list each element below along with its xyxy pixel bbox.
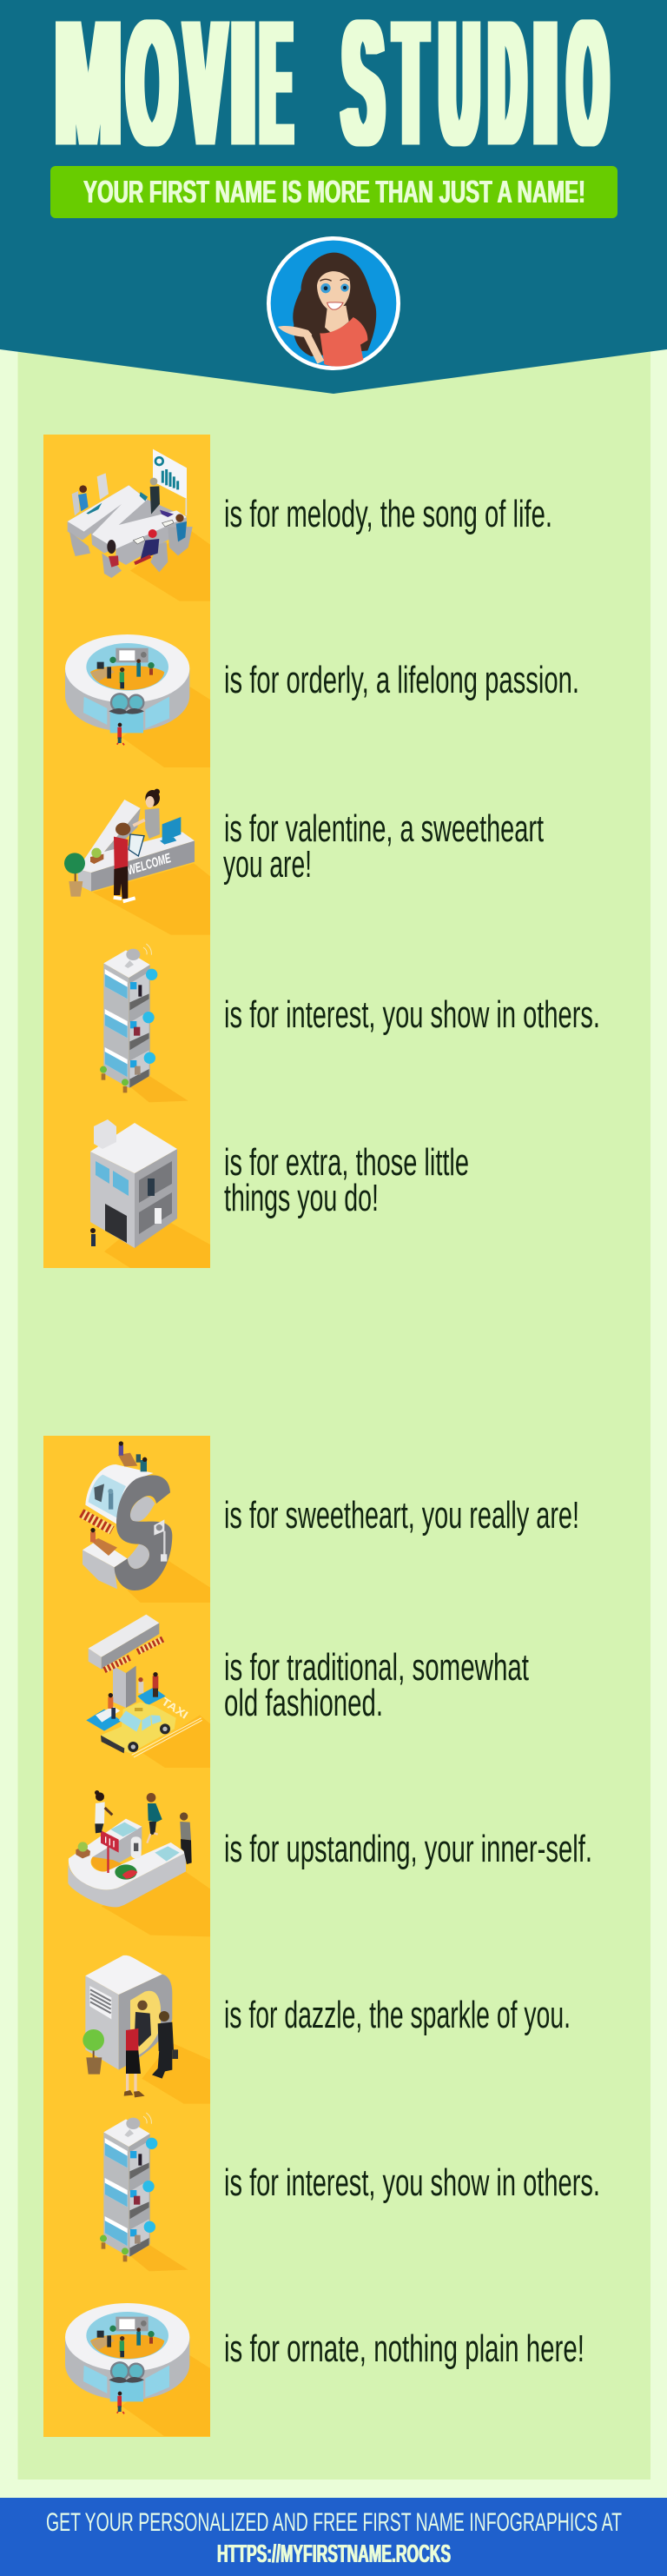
illustration: letter U food counter bbox=[68, 1790, 210, 1936]
illustration: letter V reception desk: WELCOME bbox=[126, 851, 173, 878]
subtitle bar bbox=[50, 166, 617, 218]
line: V: you are! bbox=[223, 843, 312, 886]
header banner bbox=[0, 0, 667, 394]
illustration: letter T taxi stand: TAXI bbox=[159, 1696, 190, 1722]
footer: HTTPS://MYFIRSTNAME.ROCKS bbox=[217, 2540, 451, 2568]
illustration: letter I tower bbox=[100, 944, 188, 1102]
first name image column: MOVIE bbox=[43, 435, 210, 1268]
illustration: letter S building bbox=[82, 1441, 210, 1603]
line: V bbox=[223, 807, 544, 886]
illustration: letter E building bbox=[90, 1119, 210, 1268]
second name image column: STUDIO bbox=[43, 1436, 210, 2437]
footer bbox=[0, 2498, 667, 2576]
illustration: letter O optician ring (repeat) bbox=[65, 2303, 210, 2436]
illustration: letter M meeting table bbox=[68, 449, 210, 601]
title bbox=[56, 0, 607, 183]
line: E bbox=[224, 1141, 469, 1219]
line: T: is for traditional, somewhat bbox=[224, 1646, 529, 1689]
line: T bbox=[224, 1646, 529, 1724]
illustration: letter O optician ring bbox=[65, 634, 210, 767]
line: E: things you do! bbox=[224, 1177, 379, 1219]
avatar portrait bbox=[267, 236, 400, 370]
illustration: letter V reception desk bbox=[64, 789, 210, 935]
illustration: letter T taxi stand bbox=[86, 1615, 210, 1768]
illustration: letter D lobby bbox=[83, 1955, 210, 2104]
line: T: old fashioned. bbox=[224, 1682, 383, 1724]
illustration: letter I tower (repeat) bbox=[100, 2113, 188, 2271]
line: E: is for extra, those little bbox=[224, 1141, 469, 1184]
